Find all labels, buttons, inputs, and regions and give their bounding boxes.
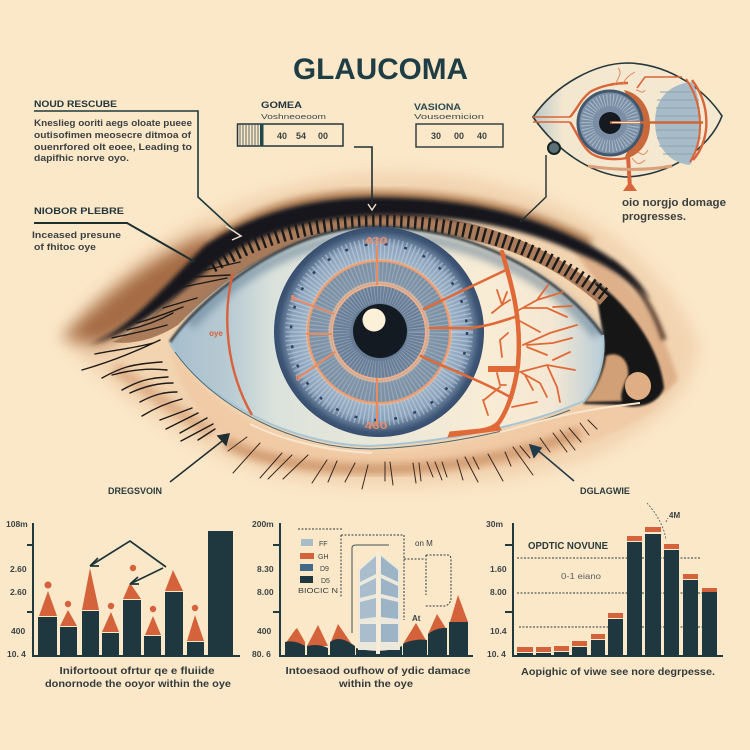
iris measurement lines <box>292 245 450 425</box>
lower band <box>588 166 672 169</box>
legend <box>298 539 338 595</box>
legend labels: BIOCIC N <box>298 588 338 595</box>
heading: VASIONA <box>414 102 461 113</box>
paragraph: outisofimen meosecre ditmoa of <box>34 130 192 140</box>
legend labels: FF <box>319 541 328 548</box>
caruncle <box>625 372 651 400</box>
chart: middle with cross-section <box>252 519 473 690</box>
label: lower left: DREGSVOIN <box>108 486 162 497</box>
scale numbers: 54 <box>296 131 306 141</box>
arrow: lower left <box>170 434 229 482</box>
arrow tip <box>226 226 241 240</box>
optic axis <box>610 121 703 124</box>
upper lid edge <box>170 227 603 342</box>
caption: Intoesaod oufhow of ydic damace <box>286 665 471 677</box>
caption: Inifortoout ofrtur qe e fluiide <box>60 665 215 677</box>
legend labels: D9 <box>320 566 329 573</box>
pupil <box>599 112 621 134</box>
stub <box>488 366 516 372</box>
leader line <box>520 155 546 222</box>
left marker <box>306 333 332 335</box>
axis labels: 8.00 <box>257 587 274 597</box>
lower rim <box>170 335 604 446</box>
dark pocket at outer corner <box>583 280 664 407</box>
axis labels: 200m <box>252 519 274 529</box>
axis labels <box>252 519 274 659</box>
lower lid skin <box>170 345 664 472</box>
fine branches right <box>512 285 577 407</box>
caption: Aopighic of viwe see nore degrpesse. <box>521 666 715 678</box>
axis labels: 30m <box>486 519 503 529</box>
connectors to iris <box>424 269 508 309</box>
marker <box>260 124 264 146</box>
peak callout line <box>647 503 668 540</box>
iris <box>274 227 484 437</box>
axis labels <box>6 519 28 659</box>
nerve upper branch <box>570 83 628 117</box>
axis labels <box>486 519 507 659</box>
caption: optic nerve damage: oio norgjo domage <box>622 197 726 209</box>
bottom marker <box>376 378 378 425</box>
subheading: Voshneoeoom <box>261 114 326 121</box>
scale numbers <box>431 131 487 141</box>
orange crescent <box>624 90 650 159</box>
skin halo around the eye <box>62 171 700 487</box>
iris mid fibres <box>320 273 438 391</box>
retina lines <box>656 92 701 154</box>
axis labels: 10.4 <box>490 626 507 636</box>
axis labels: 400 <box>257 626 271 636</box>
left sclera vessel <box>227 273 252 415</box>
legend labels: GH <box>318 554 328 561</box>
iris value left lower: 0 <box>296 374 301 383</box>
orange wall outer <box>692 80 706 160</box>
left corner lashes <box>102 362 215 441</box>
lash base shading <box>225 432 580 469</box>
shaft <box>354 147 372 204</box>
text <box>32 230 121 253</box>
dotted frames <box>298 529 451 620</box>
iris value left upper: 8 <box>291 294 296 303</box>
paragraph: Kneslieg ooriti aegs oloate pueee <box>34 118 192 128</box>
spine <box>376 552 380 654</box>
axis <box>505 523 723 656</box>
stem flare <box>623 184 637 191</box>
axis labels: 400 <box>11 626 25 636</box>
lower lid highlight <box>250 403 640 453</box>
brown shading at upper left <box>62 235 240 345</box>
dark upper lid wedge <box>88 197 650 345</box>
subheading: Vousoemicion <box>414 114 484 121</box>
axis <box>273 523 473 656</box>
leader arrow <box>34 111 237 233</box>
axis highlight <box>612 122 640 124</box>
chart: left bars <box>6 519 240 690</box>
frame label: on M <box>415 539 433 548</box>
legend swatches <box>301 539 313 546</box>
chart: right bars <box>486 503 723 678</box>
dark bars <box>38 531 233 656</box>
scale numbers: 40 <box>277 131 287 141</box>
diagram: optic nerve cross-section <box>520 63 722 222</box>
callout: top left pressure text <box>34 99 241 240</box>
label: lower right: DGLAGWIE <box>580 486 630 497</box>
iris <box>578 91 642 155</box>
vessel upper <box>637 77 682 88</box>
caption: optic nerve damage: progresses. <box>622 211 686 223</box>
illustration: main eye <box>62 171 700 489</box>
axis labels: 8.00 <box>490 587 507 597</box>
orange peaks <box>285 595 468 650</box>
axis labels: 2.60 <box>10 564 27 574</box>
caption: within the oye <box>338 678 413 690</box>
legend labels <box>298 541 338 595</box>
scale numbers: 00 <box>318 131 328 141</box>
axis labels: 80. 6 <box>252 649 271 659</box>
iris fibres <box>587 100 633 146</box>
title: GLAUCOMA <box>293 53 468 86</box>
lash band base <box>112 213 608 343</box>
scale: vision <box>414 102 503 147</box>
frame <box>352 545 389 633</box>
scale numbers: 40 <box>477 131 487 141</box>
upper left marker <box>292 298 334 314</box>
axis labels: 108m <box>6 519 28 529</box>
top marker <box>376 245 378 285</box>
panels left <box>360 556 376 642</box>
dark bars <box>517 534 717 656</box>
orange wall inner <box>686 79 700 162</box>
orange caps <box>517 527 717 652</box>
main trunk <box>497 252 519 425</box>
axis labels: 10. 4 <box>487 649 506 659</box>
caption: optic nerve damage <box>622 197 726 223</box>
text: of fhitoc oye <box>34 242 96 253</box>
outer crease on right <box>610 262 664 340</box>
dotted guides <box>517 558 717 627</box>
chart title: OPDTIC NOVUNE <box>528 541 608 552</box>
skin fold in corner <box>585 354 628 402</box>
block body <box>358 552 400 650</box>
paragraph: dapifhic norve oyo. <box>34 153 129 163</box>
iris inner fibres <box>341 294 417 370</box>
caption: donornode the ooyor within the oye <box>45 678 231 690</box>
lower left marker <box>298 352 335 378</box>
panels right <box>381 556 398 642</box>
small circle pointer <box>548 142 560 154</box>
paragraph: ouenrfored olt eoee, Leading to <box>34 142 193 152</box>
axis <box>27 523 240 656</box>
heading: GOMEA <box>261 100 302 111</box>
axis labels: 8.30 <box>257 564 274 574</box>
fine vessels <box>615 68 648 164</box>
scale numbers: 00 <box>454 131 464 141</box>
orange dots <box>44 565 198 612</box>
dark mountains <box>285 622 468 656</box>
scale box <box>416 124 503 147</box>
ring: inner <box>332 285 426 379</box>
callout: lower left pressure text <box>32 206 195 262</box>
iris spots <box>291 244 467 420</box>
upper lid band on right <box>570 245 678 396</box>
arrow: cornea to eye <box>354 147 376 210</box>
nerve left <box>533 117 570 122</box>
scale numbers <box>277 131 328 141</box>
sclera <box>170 227 604 446</box>
scale: cornea <box>238 100 343 146</box>
orange triangles <box>39 568 204 641</box>
base wedge <box>448 422 501 437</box>
chart note: 0-1 eiano <box>561 572 602 581</box>
nerve lower branch <box>570 122 628 159</box>
upper lash marks <box>212 222 605 295</box>
axis labels: 2.60 <box>10 587 27 597</box>
lower rim shadow <box>175 352 570 449</box>
scale numbers: 30 <box>431 131 441 141</box>
lower left lash shading <box>115 368 212 432</box>
hatch <box>240 124 258 146</box>
blue retina panel <box>655 82 700 165</box>
fine branches left <box>483 290 510 415</box>
eyeball outline <box>533 63 722 177</box>
axis labels: 1.60 <box>490 564 507 574</box>
axis labels: 10. 4 <box>7 649 26 659</box>
caption <box>45 665 231 690</box>
iris value top: 430 <box>364 236 388 247</box>
small label: At <box>412 614 421 623</box>
scale box <box>238 124 343 146</box>
iris fibres <box>296 249 462 415</box>
arrow: lower right <box>530 445 574 481</box>
caption <box>286 665 471 690</box>
upper left lashes <box>82 262 240 370</box>
leader line <box>34 223 195 262</box>
sclera value left: oye <box>209 329 223 338</box>
legend labels: D5 <box>321 578 330 585</box>
text: Inceased presune <box>32 230 121 241</box>
heading: NOUD RESCUBE <box>34 99 117 110</box>
brown shading above the lid <box>215 196 590 244</box>
heading: NIOBOR PLEBRE <box>34 206 124 217</box>
paragraph <box>34 118 193 163</box>
pupil <box>353 304 407 358</box>
nerve stem down <box>628 156 630 188</box>
iris value bottom: 460 <box>364 421 388 432</box>
pupil highlight <box>362 308 386 332</box>
optic vessel network <box>421 252 577 437</box>
ring: outer <box>308 261 450 403</box>
tip <box>368 204 376 210</box>
cross-section building <box>352 545 400 654</box>
peak label: 4M <box>669 511 680 520</box>
upper sclera shadow <box>190 236 598 335</box>
trend arrows <box>90 541 166 584</box>
lower lashes <box>228 420 597 489</box>
